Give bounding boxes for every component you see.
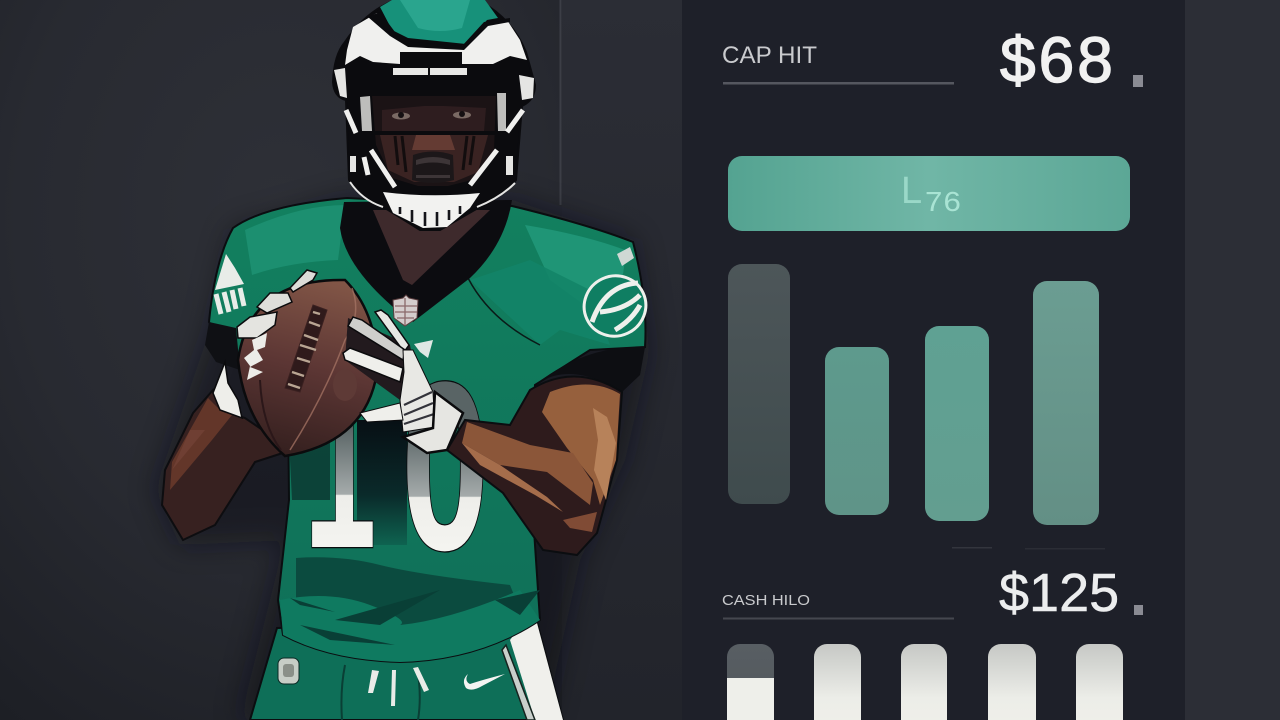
sleeve cuff: [535, 347, 645, 392]
helmet side logos: [334, 68, 534, 175]
shoulder patch: [617, 247, 634, 266]
waist cords: [368, 667, 429, 706]
sleeve logo: left stripe: [215, 254, 244, 314]
football: [238, 280, 378, 456]
helmet wings: [345, 13, 527, 65]
progress bar: [728, 156, 1130, 231]
jersey number: 0: [401, 333, 489, 601]
torso shadow behind number: [289, 440, 330, 500]
marker: cap hit dot: [1133, 75, 1143, 87]
marker: cash dot: [1134, 605, 1143, 615]
neck and collar: [340, 200, 512, 326]
bar chart: upper: [728, 264, 1099, 525]
progress bar label: L: [901, 170, 922, 212]
background: middle wall: [562, 0, 682, 720]
player illustration: [155, 0, 656, 720]
NFL shield: [393, 295, 418, 326]
chin strap: [383, 192, 480, 228]
progress bar label: [901, 170, 962, 217]
pants stripe: [510, 623, 563, 720]
helmet: [333, 0, 535, 230]
face: [372, 96, 496, 186]
background: right strip: [1185, 0, 1280, 720]
value: cap hit amount: $68: [1000, 24, 1116, 96]
chest eagle patch: [414, 340, 433, 358]
helmet side pads: [360, 93, 506, 131]
face mask bars: [346, 110, 523, 187]
arm: left: [162, 390, 292, 540]
background: left wall: [0, 0, 562, 720]
waist patch: [278, 658, 299, 684]
helmet crown: [380, 0, 498, 44]
progress bar label: 76: [925, 186, 962, 217]
jersey torso: [205, 198, 656, 662]
visor bar: [393, 68, 467, 75]
jersey number: 1: [303, 340, 378, 623]
pants: [250, 622, 563, 720]
arm: right: [447, 376, 622, 555]
heading: cash hilo: CASH HILO: [722, 593, 810, 609]
helmet lower trim: [350, 182, 515, 207]
jersey number: [303, 333, 489, 623]
eyes: [392, 112, 410, 120]
bar chart: lower: [727, 644, 1123, 720]
heading: cap hit: CAP HIT: [722, 42, 817, 69]
panel: stats: [682, 0, 1185, 720]
glove: left hand: [213, 270, 317, 418]
value: cash amount: $125: [999, 563, 1119, 623]
sleeve logo: wing: [574, 266, 656, 346]
football label: [285, 305, 327, 392]
icon: swoosh: [464, 674, 505, 690]
glove: right hand: [343, 310, 463, 453]
